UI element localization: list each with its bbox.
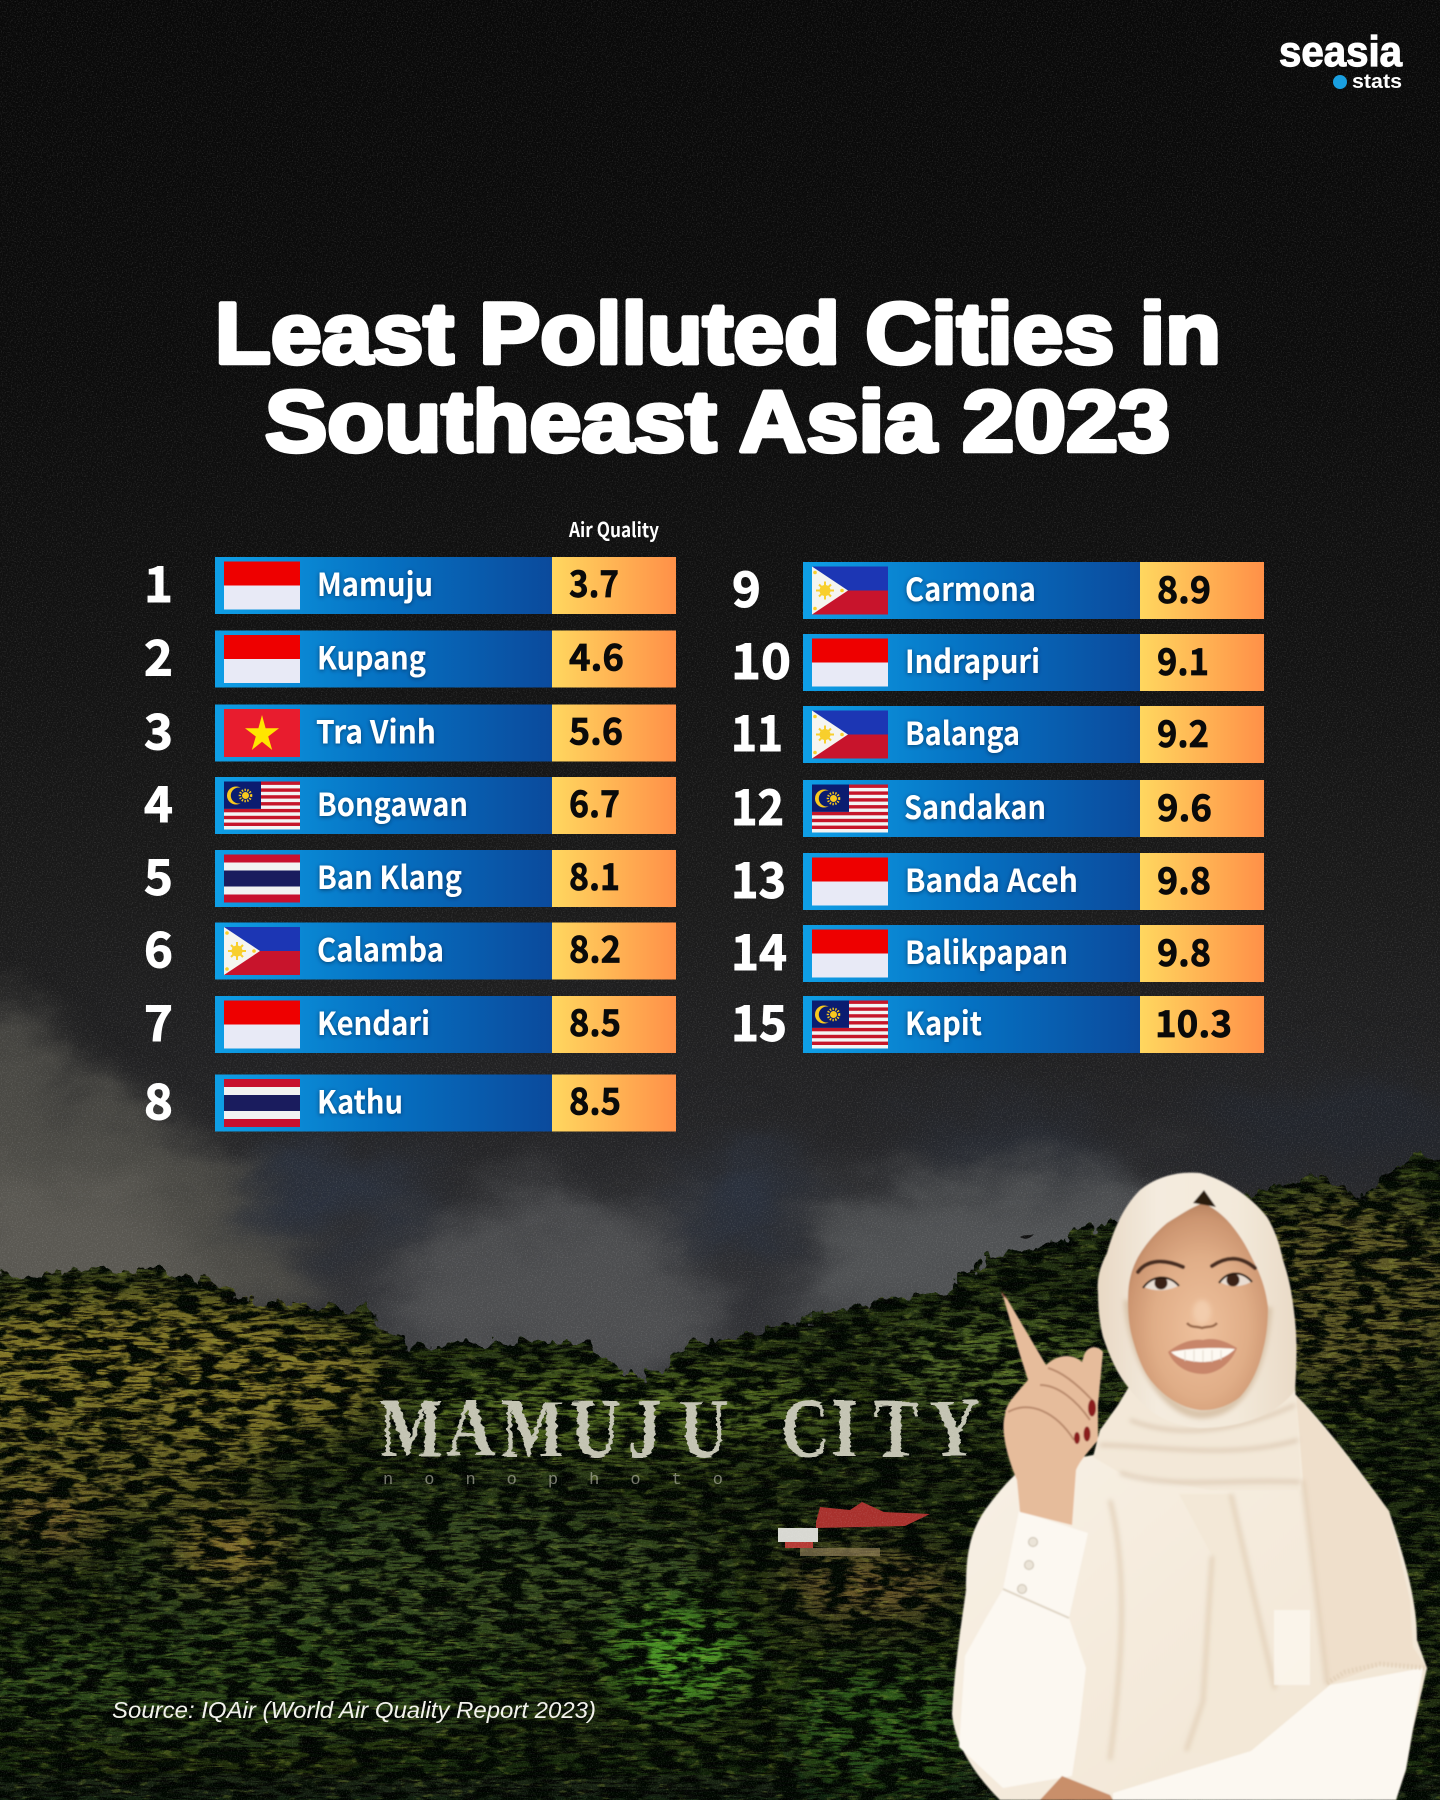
row 9 Carmona: 8.9 [1157,560,1211,614]
row 2 Kupang [144,620,676,690]
row 13 Banda Aceh: 9.8 [1157,851,1211,905]
row 9 Carmona: 9 [732,551,761,622]
row 6 Calamba: Calamba [317,926,444,972]
woman: sleeve cuff seam and buttons [1003,1538,1069,1618]
row 4 Bongawan: Bongawan [317,780,468,826]
title [215,286,1221,470]
row 1 Mamuju: 3.7 [569,554,619,608]
row 4 Bongawan: 4 [144,766,173,837]
woman: smile [1168,1339,1237,1374]
woman: hijab [1098,1173,1296,1428]
bird on the skyline [1020,1234,1034,1239]
row 1 Mamuju [144,546,676,617]
row 15 Kapit: 10.3 [1155,994,1232,1048]
background: forested hillside [0,1100,1440,1800]
row 12 Sandakan [731,769,1264,840]
row 15 Kapit [731,985,1264,1056]
woman: right shoulder drape [1296,1395,1427,1685]
woman: nose [1187,1300,1217,1328]
row 3 Tra Vinh [144,694,676,764]
logo: seasia stats: stats [1352,71,1402,93]
hillside sign: MAMUJU CITY: MAMUJU CITY [379,1382,978,1475]
row 15 Kapit: 15 [731,985,787,1056]
row 4 Bongawan: 6.7 [569,774,620,828]
woman: shirt pocket [1274,1610,1310,1685]
woman: hijab shadow around face [1128,1300,1268,1414]
woman: shirt body [952,1395,1427,1800]
woman: shirt fold shading [1110,1480,1327,1760]
hillside small watermark: nonophoto [383,1471,723,1490]
row 11 Balanga: Balanga [905,709,1020,755]
row 7 Kendari: Kendari [317,999,430,1045]
row 8 Kathu: Kathu [317,1078,403,1124]
row 10 Indrapuri [731,623,1264,694]
title: Least Polluted Cities in [215,286,1221,382]
source note: Source: IQAir (World Air Quality Report 2023) [112,1697,596,1723]
woman: neck wrap [1093,1385,1301,1490]
row 7 Kendari: 7 [144,985,173,1056]
row 15 Kapit: Kapit [905,999,982,1045]
woman: raised hand [1001,1291,1103,1525]
row 10 Indrapuri: Indrapuri [905,637,1040,683]
row 3 Tra Vinh: 5.6 [569,702,623,756]
row 5 Ban Klang: 8.1 [569,847,620,901]
row 2 Kupang: 4.6 [569,628,624,682]
background: clouds [0,990,1440,1410]
row 5 Ban Klang [144,839,676,910]
row 14 Balikpapan: 9.8 [1157,923,1211,977]
row 11 Balanga [731,695,1264,766]
row 10 Indrapuri: 9.1 [1157,632,1209,686]
row 14 Balikpapan [731,914,1264,985]
row 5 Ban Klang: 5 [144,839,173,910]
row 7 Kendari: 8.5 [569,993,621,1047]
row 3 Tra Vinh: 3 [144,694,173,764]
row 8 Kathu [144,1064,676,1134]
woman: scarf fringe [1327,1664,1427,1683]
panel: ranking 9 to 15 [731,551,1264,1056]
woman: hanging scarf [1179,1494,1275,1764]
row 6 Calamba: 8.2 [569,920,621,974]
woman: raised sleeve [959,1511,1088,1788]
row 1 Mamuju: 1 [144,546,173,617]
woman: lower forearm sleeve [1113,1668,1423,1800]
row 12 Sandakan: Sandakan [904,783,1046,829]
row 6 Calamba [144,912,676,982]
row 6 Calamba: 6 [144,912,173,982]
row 11 Balanga: 9.2 [1157,704,1209,758]
row 12 Sandakan: 9.6 [1157,778,1212,832]
row 1 Mamuju: Mamuju [317,560,433,606]
woman: eyebrows [1138,1259,1255,1272]
logo: seasia stats: seasia [1279,28,1403,76]
column header: Air Quality: Air Quality [568,514,659,543]
row 8 Kathu: 8 [144,1064,173,1134]
row 13 Banda Aceh: Banda Aceh [905,856,1078,902]
row 5 Ban Klang: Ban Klang [317,853,462,899]
row 11 Balanga: 11 [731,695,783,766]
row 2 Kupang: 2 [144,620,173,690]
row 12 Sandakan: 12 [731,769,784,840]
woman: lower hand [1040,1776,1113,1800]
woman: hair notch [1193,1190,1216,1207]
row 13 Banda Aceh: 13 [731,842,786,913]
row 14 Balikpapan: Balikpapan [905,928,1068,974]
row 3 Tra Vinh: Tra Vinh [316,708,436,754]
row 10 Indrapuri: 10 [731,623,791,694]
row 14 Balikpapan: 14 [731,914,787,985]
row 4 Bongawan [144,766,676,837]
title: Southeast Asia 2023 [265,374,1170,470]
woman: eyes [1143,1274,1252,1290]
row 9 Carmona: Carmona [905,565,1036,611]
row 8 Kathu: 8.5 [569,1072,621,1126]
illustration: smiling woman in cream hijab pointing up [952,1173,1427,1800]
row 7 Kendari [144,985,676,1056]
hillside houses: red roof and white building [778,1502,930,1556]
woman: wrap fold lines [1100,1405,1300,1482]
woman: face [1128,1203,1268,1410]
panel: ranking 1 to 8 [144,546,676,1134]
row 2 Kupang: Kupang [317,634,426,680]
row 13 Banda Aceh [731,842,1264,913]
row 9 Carmona [732,551,1264,622]
